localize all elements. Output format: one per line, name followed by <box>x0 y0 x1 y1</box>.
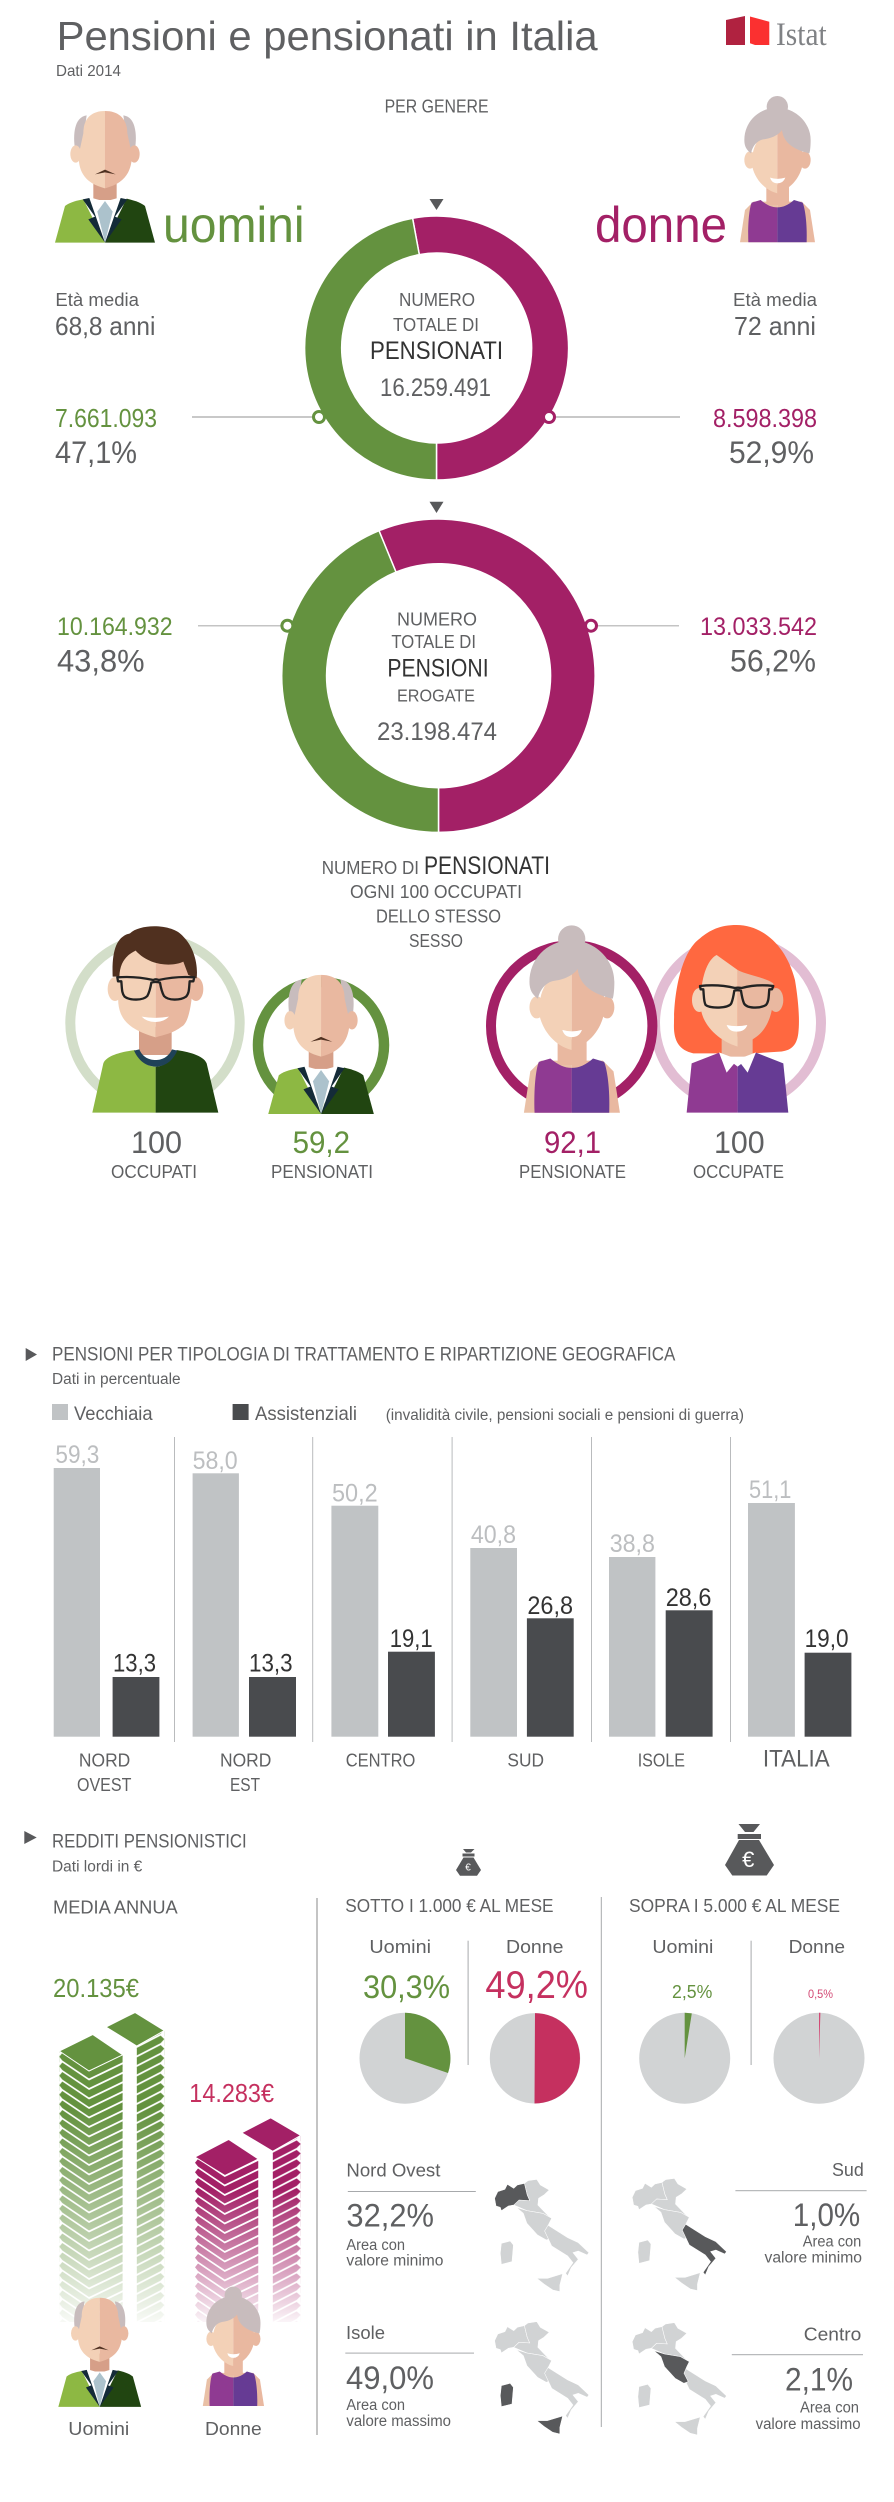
donut centre text: NUMERO <box>399 289 475 310</box>
stats: women pensions: 56,2% <box>730 643 816 679</box>
pie: uomini 30,3% <box>360 2013 450 2104</box>
icon: young woman with red hair <box>674 925 799 1113</box>
group: italia <box>748 1476 851 1773</box>
stat: 59,2 pensionati <box>271 1124 373 1182</box>
donut centre text: TOTALE DI <box>393 314 479 335</box>
icon: small money bag <box>456 1849 481 1876</box>
pie: donne 49,2% <box>490 2013 580 2104</box>
panel: sud minimum: valore minimo <box>764 2250 862 2267</box>
heading: sotto i 1.000: SOTTO I 1.000 € AL MESE <box>345 1895 554 1916</box>
icon: elderly man <box>58 2298 141 2407</box>
subtitle: dati in percentuale: Dati in percentuale <box>52 1371 181 1388</box>
heading: sopra i 5.000: SOPRA I 5.000 € AL MESE <box>629 1895 840 1916</box>
panel: isole maximum: 49,0% <box>346 2360 434 2396</box>
group: nord est: 58,0 <box>193 1447 238 1475</box>
value: women 14.283: 14.283€ <box>189 2080 274 2108</box>
label: uomini: uomini <box>163 197 305 253</box>
leader line: men first donut <box>192 412 324 422</box>
group: nord est: NORD <box>220 1750 271 1771</box>
value: 30,3%: 30,3% <box>363 1969 450 2005</box>
heading: per genere: PER GENERE <box>385 96 489 117</box>
stat: 92,1 pensionate <box>519 1124 626 1182</box>
group: nord ovest <box>54 1441 159 1795</box>
leader line: women second donut <box>586 620 679 631</box>
panel: sud minimum: Area con <box>803 2234 861 2251</box>
stats: women average age: 72 anni <box>734 311 816 341</box>
stat: 100 occupate women <box>693 1124 784 1182</box>
icon: elderly woman <box>203 2287 264 2406</box>
icon: large money bag: € <box>742 1847 754 1872</box>
label: donne: donne <box>595 197 727 253</box>
panel: sotto i 1.000 euro <box>345 1849 588 2104</box>
stat: 100 occupati men: OCCUPATI <box>111 1161 197 1182</box>
group: nord ovest: NORD <box>79 1750 130 1771</box>
panel: centro maximum: Area con <box>800 2400 859 2417</box>
group: nord ovest: OVEST <box>77 1774 131 1795</box>
icon: green money stack <box>55 2012 169 2322</box>
group: nord est <box>193 1447 296 1795</box>
panel: centro maximum: Centro <box>804 2324 861 2345</box>
stats: women pensioners <box>713 403 817 470</box>
donut centre text: TOTALE DI <box>391 631 476 652</box>
ring: pensionate women <box>491 945 652 1107</box>
icon: elderly man <box>55 111 155 243</box>
pie: donne 0,5% <box>774 2013 864 2104</box>
donut centre text <box>377 609 497 746</box>
group: nord est: 13,3 <box>249 1650 293 1678</box>
stat: 59,2 pensionati: 59,2 <box>293 1124 350 1160</box>
panel: centro maximum <box>732 2324 863 2433</box>
panel: sud minimum: Sud <box>832 2159 864 2180</box>
label: donne: Donne <box>789 1936 845 1957</box>
stat: 92,1 pensionate: 92,1 <box>544 1124 601 1160</box>
map: centro highlighted <box>632 2323 727 2435</box>
legend: Assistenziali <box>255 1403 357 1425</box>
Istat logo: Istat <box>776 17 827 53</box>
panel: nord ovest minimum: Area con <box>346 2237 405 2254</box>
ring: pensionati men <box>258 982 384 1108</box>
stats: men pensioners: 47,1% <box>55 434 137 470</box>
subtitle: data year: Dati 2014 <box>56 63 121 80</box>
group: sud: SUD <box>507 1750 544 1771</box>
label: uomini: Uomini <box>652 1936 713 1957</box>
value: men 20.135: 20.135€ <box>53 1975 139 2003</box>
group: centro: 19,1 <box>390 1625 433 1653</box>
stats: men pensions: 10.164.932 <box>57 613 173 641</box>
label: donne: Donne <box>205 2418 262 2439</box>
heading: pensioni per tipologia: PENSIONI PER TIPOLOGIA DI TRATTAMENTO E RIPARTIZIONE GEOGRAFICA <box>52 1344 675 1366</box>
stat: 100 occupate women: OCCUPATE <box>693 1161 784 1182</box>
group: isole <box>609 1530 713 1771</box>
icon: elderly man in ring <box>268 975 374 1114</box>
value: 2,5%: 2,5% <box>672 1981 712 2002</box>
heading: pensionati ogni 100 occupati: DELLO STESSO <box>376 906 501 927</box>
stat: 100 occupate women: 100 <box>714 1124 765 1160</box>
heading: pensionati ogni 100 occupati: PENSIONATI <box>424 852 550 880</box>
group: sud: 26,8 <box>527 1592 573 1620</box>
stats: women average age <box>733 289 818 341</box>
title: Pensioni e pensionati in Italia <box>57 13 598 59</box>
group: isole: ISOLE <box>638 1750 685 1771</box>
icon: large money bag <box>725 1824 774 1876</box>
panel: sopra i 5.000 euro <box>629 1824 864 2104</box>
group: nord ovest: 59,3 <box>55 1441 99 1469</box>
donut centre text: PENSIONI <box>387 655 489 683</box>
leader line: women first donut <box>544 412 680 422</box>
panel: nord ovest minimum: Nord Ovest <box>346 2160 440 2181</box>
group: centro <box>331 1480 435 1771</box>
group: italia: 51,1 <box>749 1476 791 1504</box>
icon: young man with glasses <box>92 926 218 1113</box>
stat: 59,2 pensionati: PENSIONATI <box>271 1161 373 1182</box>
heading: pensionati ogni 100 occupati: SESSO <box>409 930 463 951</box>
stats: men average age <box>55 289 155 341</box>
donut centre text: 16.259.491 <box>380 374 491 402</box>
stats: women pensioners: 52,9% <box>729 434 814 470</box>
stats: men pensioners <box>55 403 157 470</box>
icon: magenta money stack <box>190 2118 305 2322</box>
icon: elderly woman in ring <box>524 925 620 1113</box>
panel: nord ovest minimum: 32,2% <box>346 2198 434 2234</box>
legend: Vecchiaia <box>74 1403 153 1425</box>
arrow: section marker pensioni per tipologia <box>26 1348 37 1361</box>
panel: centro maximum: 2,1% <box>785 2362 853 2398</box>
group: isole: 38,8 <box>610 1530 655 1558</box>
label: donne: Donne <box>506 1936 563 1957</box>
stats: women pensions <box>700 613 817 679</box>
arrow: section marker redditi <box>24 1831 37 1844</box>
donut centre text: 23.198.474 <box>377 718 497 746</box>
pie: uomini 2,5% <box>639 2013 730 2104</box>
value: 0,5%: 0,5% <box>808 1987 833 2001</box>
stats: women average age: Età media <box>733 289 818 310</box>
panel: isole maximum: valore massimo <box>346 2413 451 2430</box>
heading: pensionati ogni 100 occupati: OGNI 100 OCCUPATI <box>350 881 522 902</box>
group: sud <box>470 1521 574 1771</box>
heading: redditi pensionistici: REDDITI PENSIONISTICI <box>52 1830 247 1852</box>
donut chart: numero totale di pensioni erogate <box>282 519 595 832</box>
group: italia: 19,0 <box>805 1625 849 1653</box>
ring: occupate women <box>655 940 821 1106</box>
donut centre text: EROGATE <box>397 686 475 706</box>
panel: isole maximum: Isole <box>346 2322 385 2343</box>
stats: women pensioners: 8.598.398 <box>713 403 817 433</box>
heading: pensionati ogni 100 occupati <box>322 852 550 951</box>
leader line: men second donut <box>198 620 293 631</box>
ring: occupati men <box>70 938 240 1108</box>
label: uomini: Uomini <box>369 1936 431 1957</box>
stats: men pensioners: 7.661.093 <box>55 403 157 433</box>
map: isole highlighted <box>495 2322 589 2434</box>
panel: isole maximum: Area con <box>346 2397 405 2414</box>
value: 49,2%: 49,2% <box>485 1964 588 2007</box>
group: italia: ITALIA <box>763 1746 830 1773</box>
stats: men pensions <box>57 613 173 679</box>
map: nord ovest highlighted <box>495 2179 589 2292</box>
map: sud highlighted <box>632 2178 727 2291</box>
icon: small money bag: € <box>465 1862 471 1874</box>
label: uomini: Uomini <box>68 2418 129 2439</box>
stats: men average age: 68,8 anni <box>55 311 155 341</box>
bar chart: pensioni per ripartizione geografica <box>54 1437 851 1795</box>
donut chart: numero totale di pensionati <box>305 216 569 480</box>
heading: media annua: MEDIA ANNUA <box>53 1896 178 1917</box>
panel: centro maximum: valore massimo <box>756 2416 861 2433</box>
panel: sud minimum: 1,0% <box>793 2197 860 2233</box>
group: centro: 50,2 <box>332 1480 378 1508</box>
stats: men pensions: 43,8% <box>57 643 145 679</box>
group: isole: 28,6 <box>666 1584 711 1612</box>
legend <box>52 1403 744 1425</box>
arrow: marker above second donut <box>430 502 444 513</box>
stats: men average age: Età media <box>55 289 140 310</box>
group: centro: CENTRO <box>346 1750 415 1771</box>
panel: nord ovest minimum: valore minimo <box>346 2253 444 2270</box>
stat: 100 occupati men: 100 <box>131 1124 182 1160</box>
stat: 100 occupati men <box>111 1124 197 1182</box>
group: sud: 40,8 <box>471 1521 516 1549</box>
panel: sud minimum <box>735 2159 867 2267</box>
stat: 92,1 pensionate: PENSIONATE <box>519 1161 626 1182</box>
subtitle: dati lordi: Dati lordi in € <box>52 1858 143 1876</box>
group: nord ovest: 13,3 <box>113 1650 156 1678</box>
arrow: marker above first donut <box>430 199 444 210</box>
donut centre text <box>370 289 503 402</box>
panel: media annua <box>53 1896 305 2439</box>
donut centre text: NUMERO <box>397 609 477 630</box>
panel: isole maximum <box>345 2322 474 2430</box>
stats: women pensions: 13.033.542 <box>700 613 817 641</box>
group: nord est: EST <box>230 1774 260 1795</box>
donut centre text: PENSIONATI <box>370 337 503 365</box>
Istat logo <box>726 16 827 53</box>
heading: pensionati ogni 100 occupati: NUMERO DI <box>322 857 419 878</box>
icon: elderly woman <box>740 96 815 242</box>
panel: nord ovest minimum <box>346 2160 476 2270</box>
legend: (invalidità civile, pensioni sociali e pensioni di guerra) <box>386 1407 744 1424</box>
